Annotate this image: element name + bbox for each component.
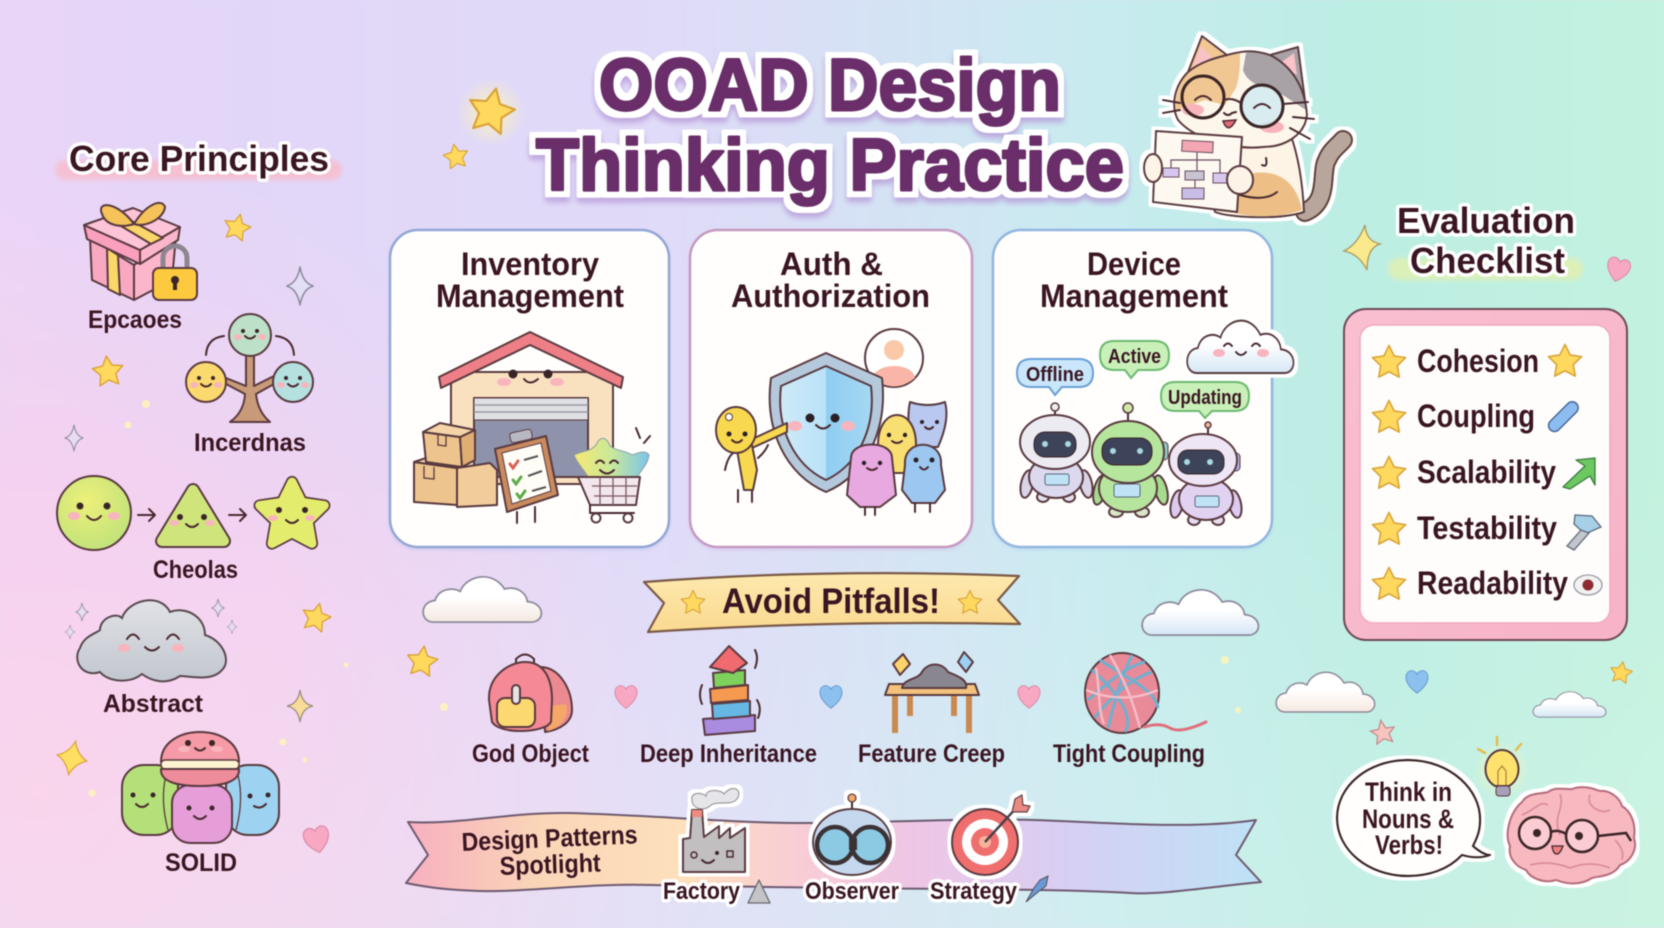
checklist row: readability: Readability — [1417, 565, 1568, 601]
heart — [1018, 686, 1040, 708]
label: polymorphism: Cheolas — [153, 556, 238, 584]
pitfall: deep inheritance: Deep Inheritance — [640, 740, 817, 768]
icon: warehouse — [439, 332, 623, 484]
icon: smiling cloud — [1187, 321, 1294, 373]
icon: user characters — [847, 402, 946, 515]
panel: device management — [993, 230, 1294, 549]
checklist row: testability: Testability — [1417, 510, 1557, 546]
heading: auth and authorization — [731, 246, 930, 314]
decorative icons — [1369, 660, 1634, 745]
icon: cat mascot — [1144, 36, 1343, 217]
checklist row: scalability: Scalability — [1417, 454, 1556, 490]
banner: avoid pitfalls — [644, 573, 1020, 632]
pitfall: tight coupling — [1053, 653, 1206, 768]
icon: user avatar — [865, 329, 923, 387]
checklist row: coupling: Coupling — [1417, 398, 1535, 434]
star — [91, 354, 124, 386]
heading: auth and authorization: Auth & — [780, 246, 883, 282]
speech bubble: think in nouns and verbs: Nouns & — [1362, 804, 1454, 834]
label: encapsulation: Epcaoes — [88, 306, 182, 334]
ribbon: design patterns spotlight: Spotlight — [499, 847, 601, 881]
pattern: strategy: Strategy — [930, 878, 1018, 905]
heading: inventory management: Management — [436, 278, 624, 314]
pitfall: feature creep — [858, 652, 1005, 768]
title: OOAD Design — [599, 45, 1061, 126]
sparkle — [287, 267, 313, 305]
status bubble: offline — [1017, 359, 1093, 395]
status bubble: active: Active — [1108, 346, 1161, 368]
heading: device management — [1040, 246, 1228, 314]
sparkle — [287, 690, 313, 722]
label: abstract: Abstract — [103, 690, 204, 718]
pattern: strategy — [930, 795, 1048, 905]
panel: core principles — [54, 138, 342, 877]
panel: evaluation checklist — [1344, 200, 1632, 640]
robot: offline — [1018, 403, 1095, 502]
status bubble: updating: Updating — [1168, 387, 1242, 409]
ribbon: design patterns spotlight — [406, 813, 1261, 893]
icon: shield — [770, 353, 883, 492]
panel: inventory management — [390, 230, 669, 549]
heading: evaluation checklist: Checklist — [1410, 240, 1565, 281]
speech bubble: think in nouns and verbs: Verbs! — [1375, 830, 1443, 860]
heading: core principles: Core Principles — [69, 138, 329, 179]
icon: polymorphism shapes — [57, 476, 324, 550]
star — [299, 600, 333, 633]
heading: evaluation checklist: Evaluation — [1397, 200, 1575, 241]
panel: pitfalls — [472, 646, 1206, 768]
decorative dots — [88, 400, 1241, 796]
icon: gift with lock — [84, 203, 197, 300]
speech bubble: think in nouns and verbs — [1337, 760, 1490, 876]
pitfall: god object — [472, 654, 590, 768]
star — [405, 644, 439, 677]
pitfall: feature creep: Feature Creep — [858, 740, 1005, 768]
heart — [820, 686, 842, 708]
checklist row: cohesion — [1372, 343, 1582, 379]
heading: device management: Management — [1040, 278, 1228, 314]
sparkle star — [1344, 225, 1380, 270]
status bubble: active — [1100, 341, 1169, 378]
icon: inheritance tree — [186, 314, 313, 422]
title — [536, 45, 1124, 206]
heading: inventory management: Inventory — [461, 246, 599, 282]
checklist row: testability — [1372, 510, 1601, 550]
heading: evaluation checklist — [1388, 200, 1583, 281]
title stars — [442, 78, 525, 170]
banner: avoid pitfalls: Avoid Pitfalls! — [722, 582, 940, 621]
star — [54, 738, 90, 778]
icon: lightbulb — [1474, 737, 1530, 798]
pattern: observer — [805, 794, 899, 905]
sparkle — [65, 425, 83, 451]
clouds — [423, 577, 1606, 717]
pitfall: deep inheritance — [640, 646, 817, 768]
robot: updating — [1168, 422, 1244, 525]
pitfall: god object: God Object — [472, 740, 590, 768]
heart — [302, 825, 332, 855]
star — [221, 211, 253, 242]
icon: key — [716, 407, 787, 502]
heart — [1604, 256, 1632, 284]
icon: clipboard — [495, 429, 558, 523]
heading: inventory management — [436, 246, 624, 314]
heading: auth and authorization: Authorization — [731, 278, 930, 314]
checklist row: coupling — [1372, 398, 1581, 434]
pitfall: tight coupling: Tight Coupling — [1053, 740, 1205, 768]
status bubble: offline: Offline — [1026, 364, 1084, 386]
pattern: factory: Factory — [663, 878, 741, 905]
heart — [615, 686, 637, 708]
robot: active — [1091, 403, 1170, 517]
status bubble: updating — [1161, 382, 1249, 418]
ribbon: design patterns spotlight: Design Patterns — [461, 819, 638, 857]
pattern: factory — [663, 788, 770, 905]
checklist frame — [1344, 309, 1627, 640]
icon: brain with glasses — [1508, 787, 1635, 884]
heading: device management: Device — [1087, 246, 1181, 282]
panel: auth and authorization — [690, 230, 972, 549]
speech bubble: think in nouns and verbs: Think in — [1365, 777, 1452, 807]
icon: shopping cart — [574, 428, 650, 522]
icon: boxes — [414, 423, 497, 507]
pattern: observer: Observer — [805, 878, 899, 905]
label: inheritance: Incerdnas — [194, 429, 306, 457]
title: Thinking Practice — [536, 125, 1124, 206]
label: solid: SOLID — [165, 849, 237, 877]
icon: abstract cloud — [65, 599, 237, 681]
icon: solid macarons — [122, 732, 279, 843]
checklist row: cohesion: Cohesion — [1417, 343, 1539, 379]
